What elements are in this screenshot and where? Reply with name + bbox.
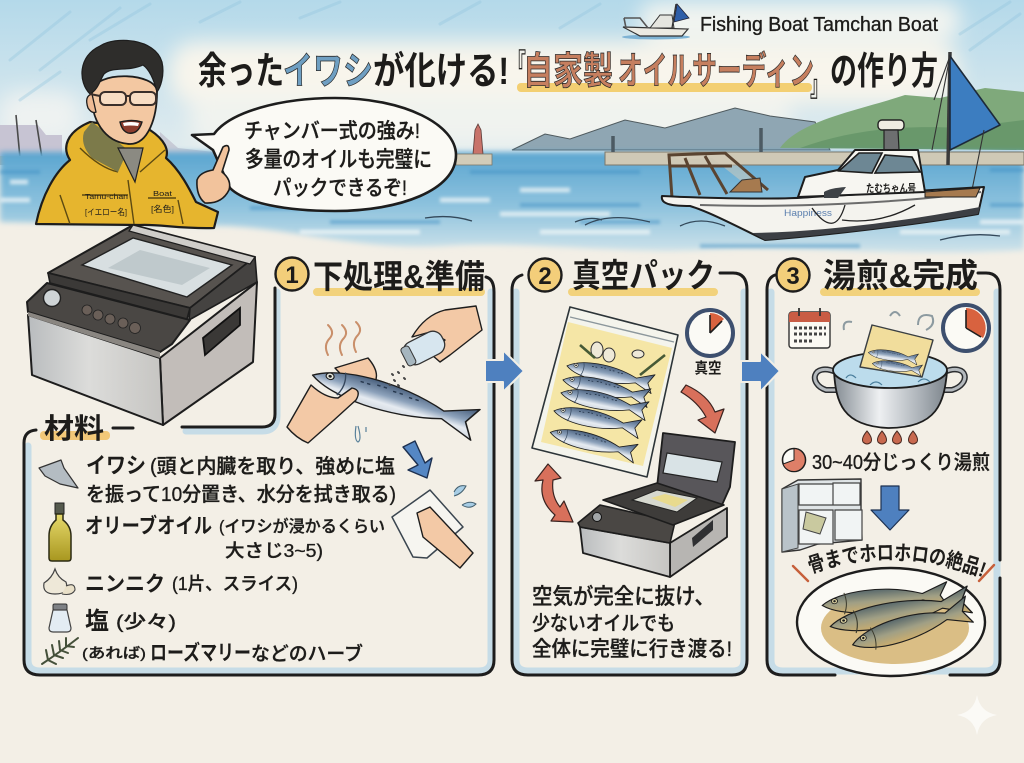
name tag right sub: [名色] xyxy=(151,204,174,214)
illustration: plate of sardines xyxy=(797,568,985,676)
brand name: Fishing Boat Tamchan Boat xyxy=(700,14,938,36)
icon: calendar xyxy=(789,308,830,348)
illustration: vacuum bag of sardines xyxy=(532,307,678,477)
ingredient: garlic: ニンニク xyxy=(85,573,165,596)
jacket xyxy=(36,122,218,228)
icon: clock simmer xyxy=(943,305,989,351)
illustrated harbour scene background xyxy=(0,0,1024,253)
sea xyxy=(0,152,1024,253)
icon: rosemary xyxy=(42,638,78,664)
smile xyxy=(120,120,142,133)
icon: fish fillet xyxy=(39,460,78,488)
heading: step 3: 3 xyxy=(786,263,800,290)
title: が化ける! xyxy=(373,51,509,93)
illustration: pot with bag xyxy=(815,325,965,428)
arrow: blue down small xyxy=(403,441,432,478)
water xyxy=(833,352,947,388)
ingredient: salt: (少々) xyxy=(116,612,176,632)
drips xyxy=(355,426,366,442)
heading: step 2: 2 xyxy=(538,263,552,290)
arrow: red curved two-way xyxy=(535,464,573,522)
pot body xyxy=(834,372,947,428)
ingredient: herbs: (あれば) xyxy=(82,645,146,661)
inner hood lining xyxy=(83,122,128,172)
heading: step 1: 下処理&準備 xyxy=(313,258,485,295)
bubble text: 多量のオイルも完璧に xyxy=(245,147,432,172)
heading: step 2: 真空パック xyxy=(572,257,715,294)
handle slot xyxy=(203,308,240,355)
illustration: vacuum sealer open xyxy=(578,433,735,577)
ingredient: olive oil: (イワシが浸かるくらい xyxy=(219,516,385,536)
bubble text: パックできるぞ! xyxy=(273,177,407,200)
icon: olive oil bottle xyxy=(49,503,71,561)
hair xyxy=(82,40,163,94)
open lid xyxy=(657,433,735,505)
cabin xyxy=(798,150,925,197)
ingredient: salt: 塩 xyxy=(85,608,109,635)
materials heading: 材料 xyxy=(44,413,104,444)
lighthouse xyxy=(456,124,492,165)
lid top xyxy=(48,225,255,308)
lid side band xyxy=(189,257,257,320)
arrow: step 2 to step 3 xyxy=(741,351,780,392)
ingredient: herbs xyxy=(82,641,363,665)
step 2 description: 空気が完全に抜け、 xyxy=(532,584,715,609)
heading: step 1: 1 xyxy=(285,262,299,289)
panel: step 3 outline xyxy=(767,273,1000,675)
mast and sail xyxy=(932,52,1000,190)
illustration: chamber vacuum sealer xyxy=(27,225,257,425)
finish slogan: 骨までホロホロの絶品! xyxy=(808,544,986,577)
title: 』 xyxy=(810,70,828,103)
body right side xyxy=(160,282,257,425)
title: 自家製 xyxy=(523,51,613,93)
pinching hand xyxy=(412,306,482,362)
glasses xyxy=(90,92,156,105)
sardine xyxy=(308,360,480,440)
sparkle watermark xyxy=(957,695,997,735)
panel: materials and step 1 outline xyxy=(24,277,494,675)
ingredient: sardine: (頭と内臓を取り、強めに塩 xyxy=(150,455,395,478)
ingredient: olive oil: オリーブオイル xyxy=(85,514,212,538)
hull xyxy=(662,187,984,240)
icon: salt shaker xyxy=(49,604,71,632)
sardines in bag xyxy=(565,356,655,394)
title: 『 xyxy=(508,49,526,82)
ingredient: garlic xyxy=(85,573,298,596)
name tag left: Tamu-chan xyxy=(85,192,128,201)
ingredient: garlic: (1片、スライス) xyxy=(172,574,298,594)
small boat logo xyxy=(622,4,690,40)
lid front band xyxy=(48,273,190,319)
herbs and garlic xyxy=(580,342,665,375)
gauge xyxy=(44,290,60,306)
control deck xyxy=(27,283,190,352)
ingredient: herbs: ローズマリー xyxy=(150,641,251,665)
step 2 description: 全体に完璧に行き渡る! xyxy=(532,638,732,661)
rear frame xyxy=(669,153,768,198)
heading: step 3: 湯煎&完成 xyxy=(823,257,978,294)
simmer time text: 30~40分じっくり湯煎 xyxy=(812,451,990,474)
head xyxy=(92,76,157,144)
control buttons xyxy=(82,305,140,334)
panel: step 2 outline xyxy=(512,273,747,675)
illustration: towel and hand xyxy=(392,486,476,568)
base front xyxy=(580,527,670,577)
heading: step 2 xyxy=(528,257,718,296)
arrow: blue down xyxy=(871,486,909,530)
ingredient: salt xyxy=(85,608,176,635)
name tag left sub: [イエロー名] xyxy=(85,207,127,217)
icon: clock vacuum xyxy=(687,310,733,356)
icon: flames xyxy=(862,431,918,444)
speech bubble xyxy=(192,98,456,211)
breakwater xyxy=(605,152,1024,165)
title: の作り方 xyxy=(830,51,938,93)
salt grains xyxy=(389,366,405,386)
arrow: step 1 to step 2 xyxy=(485,350,524,392)
illustration: salting the sardine xyxy=(287,306,482,443)
handles xyxy=(815,369,965,390)
character: Tamu-chan in yellow jacket xyxy=(36,40,218,228)
ingredient: sardine: イワシ xyxy=(86,453,146,478)
pointing hand xyxy=(197,146,230,203)
control deck xyxy=(578,505,675,543)
ingredient: sardine: を振って10分置き、水分を拭き取る) xyxy=(86,483,396,506)
base right side xyxy=(670,508,727,577)
step 2 description: 少ないオイルでも xyxy=(532,612,675,635)
dark chamber rim xyxy=(603,483,724,525)
ingredient: herbs: などのハーブ xyxy=(251,642,363,665)
radar xyxy=(878,120,904,150)
bubble text xyxy=(244,120,432,200)
body front xyxy=(28,315,163,425)
holding hand xyxy=(287,385,358,443)
name tag right: Boat xyxy=(153,189,173,198)
fishing boat illustration xyxy=(662,52,1000,240)
bubble text: チャンバー式の強み! xyxy=(244,120,420,143)
chamber tray xyxy=(632,490,697,512)
lid window xyxy=(663,453,722,482)
title highlight xyxy=(517,83,812,92)
title xyxy=(198,49,938,103)
shaker xyxy=(399,328,448,369)
arrow: red curved down xyxy=(681,385,724,433)
upper fingers xyxy=(335,358,376,384)
title: イワシ xyxy=(283,51,373,93)
distant left harbour xyxy=(0,115,214,165)
icon: pie timer xyxy=(782,448,806,472)
hull name: Happiness xyxy=(784,208,832,219)
lid window xyxy=(82,238,232,297)
title: オイルサーディン xyxy=(618,50,814,93)
ingredient: olive oil xyxy=(85,514,385,561)
ear xyxy=(87,94,96,112)
ingredient: sardine xyxy=(86,453,396,506)
illustration: refrigerator xyxy=(782,479,862,552)
icon: garlic xyxy=(44,569,75,594)
step 2 description xyxy=(532,584,732,661)
bag in pot xyxy=(860,325,933,377)
steam clouds xyxy=(844,312,933,330)
clock label: 真空 xyxy=(694,359,722,377)
ingredient: olive oil: 大さじ3~5) xyxy=(225,541,323,561)
title: 余った xyxy=(198,51,284,93)
lid rim xyxy=(129,225,255,264)
steam lines xyxy=(326,322,360,355)
mountains xyxy=(512,88,1024,150)
boat name: たむちゃん号 xyxy=(866,182,916,195)
